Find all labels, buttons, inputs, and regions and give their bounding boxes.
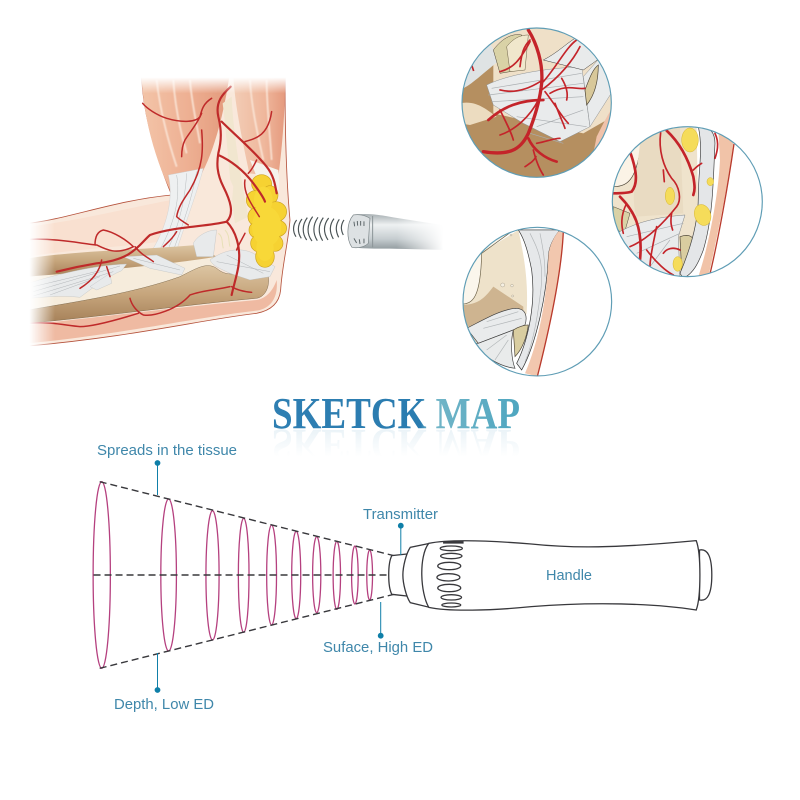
white ligaments forearm: [28, 230, 275, 298]
label: depth low ED: Depth, Low ED: [114, 697, 214, 713]
yellow fat deposit: [246, 175, 287, 267]
bottom skin band: [28, 280, 277, 343]
lower forearm bone radius: [28, 266, 269, 323]
end cap: [699, 550, 712, 600]
shockwave probe: [348, 213, 452, 253]
label: transmitter: Transmitter: [363, 507, 438, 523]
shockwave diagram: [93, 482, 712, 668]
title: SKETCK MAP: [272, 420, 520, 469]
elbow anatomy illustration: [25, 73, 452, 350]
title: SKETCK MAP: [272, 389, 520, 438]
biceps tendon: [149, 168, 203, 255]
humerus: [223, 97, 248, 223]
muscle striations: [157, 80, 272, 167]
joint cream area: [180, 157, 233, 230]
label: surface high ED: Suface, High ED: [323, 640, 433, 656]
grip ovals: [437, 546, 462, 607]
dashed spread lines: [94, 482, 394, 668]
top fade: [137, 73, 290, 93]
handpiece: [389, 541, 712, 610]
left fade: [25, 217, 55, 350]
arm skin base: [28, 77, 290, 346]
title: [272, 389, 520, 469]
shock waves: [294, 217, 344, 241]
arteries: [30, 87, 277, 327]
forearm interior cream: [28, 257, 213, 310]
handle body: [422, 541, 700, 610]
circle 1: arteries and tendons: [460, 27, 613, 180]
upper forearm bone: [28, 245, 217, 277]
detail circles: [460, 27, 767, 377]
label: handle: Handle: [546, 568, 592, 584]
leader lines: [155, 461, 403, 692]
transmitter head: [389, 554, 407, 596]
forearm skin shading: [28, 200, 173, 257]
upper arm muscle right: [233, 77, 285, 177]
pressure wave ellipses: [93, 482, 373, 668]
circle 3: healed tendon: [460, 227, 617, 377]
label: spreads in the tissue: Spreads in the tissue: [97, 443, 237, 459]
right tendon: [250, 160, 279, 200]
upper arm muscle left: [142, 77, 229, 193]
circle 2: early deposits: [610, 123, 767, 280]
cartilage rings: [218, 230, 230, 248]
neck: [403, 543, 430, 607]
